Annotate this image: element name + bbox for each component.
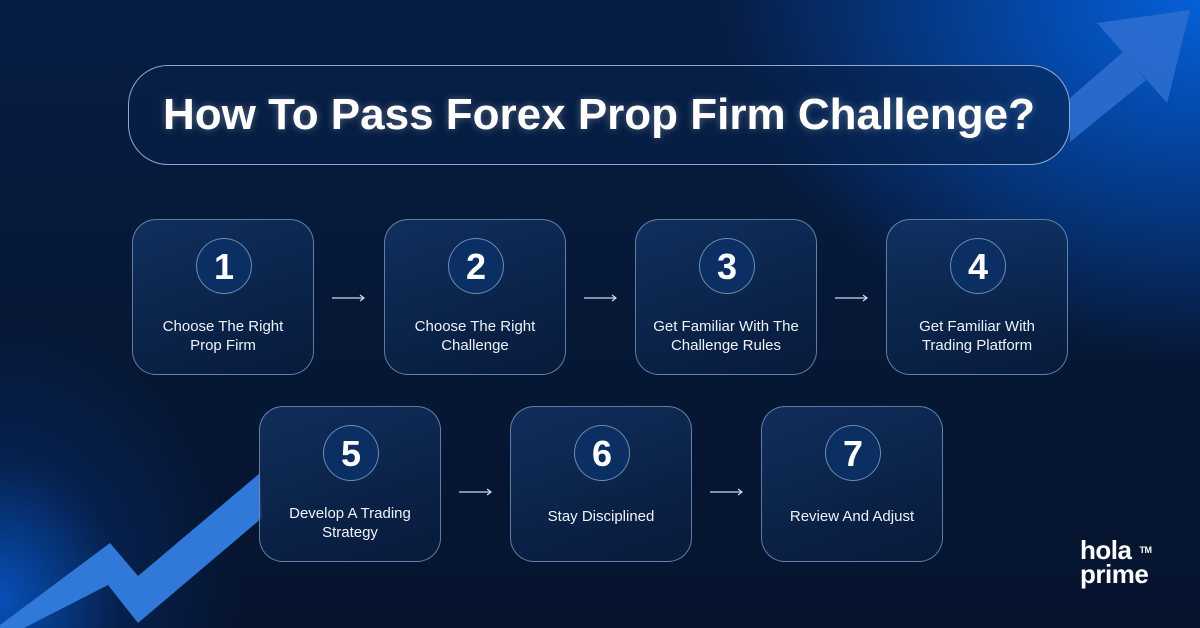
arrow: top-right rising bbox=[1070, 10, 1190, 142]
logo: prime bbox=[1080, 559, 1148, 589]
step 4 bbox=[886, 219, 1068, 375]
step 3: Get Familiar With The bbox=[653, 318, 799, 335]
title: How To Pass Forex Prop Firm Challenge? bbox=[163, 90, 1035, 139]
step 2 bbox=[384, 219, 566, 375]
step 1 bbox=[132, 219, 314, 375]
step 5: 5 bbox=[341, 433, 361, 474]
step 1: Choose The Right bbox=[163, 318, 283, 335]
logo bbox=[1080, 535, 1152, 589]
arrow 1-2 bbox=[332, 294, 365, 302]
step 2: Choose The Right bbox=[415, 318, 535, 335]
step 6 bbox=[510, 406, 692, 562]
step 7: 7 bbox=[843, 433, 863, 474]
title bbox=[128, 65, 1070, 165]
step 3: 3 bbox=[717, 246, 737, 287]
step 6: 6 bbox=[592, 433, 612, 474]
step 3: Challenge Rules bbox=[671, 337, 781, 354]
step 4: Trading Platform bbox=[922, 337, 1032, 354]
step 4: 4 bbox=[968, 246, 988, 287]
step 2: Challenge bbox=[441, 337, 509, 354]
arrow 2-3 bbox=[584, 294, 617, 302]
arrow 5-6 bbox=[459, 488, 492, 496]
step 1: 1 bbox=[214, 246, 234, 287]
step 7 bbox=[761, 406, 943, 562]
step 5: Strategy bbox=[322, 524, 378, 541]
step 5: Develop A Trading bbox=[289, 505, 411, 522]
step 6: Stay Disciplined bbox=[548, 508, 654, 525]
arrow: bottom-left rising line bbox=[0, 473, 262, 628]
step 1: Prop Firm bbox=[190, 337, 256, 354]
logo: hola TM bbox=[1080, 535, 1151, 565]
step 5 bbox=[259, 406, 441, 562]
step 7: Review And Adjust bbox=[790, 508, 914, 525]
arrow 6-7 bbox=[710, 488, 743, 496]
arrow 3-4 bbox=[835, 294, 868, 302]
step 2: 2 bbox=[466, 246, 486, 287]
step 3 bbox=[635, 219, 817, 375]
step 4: Get Familiar With bbox=[919, 318, 1035, 335]
